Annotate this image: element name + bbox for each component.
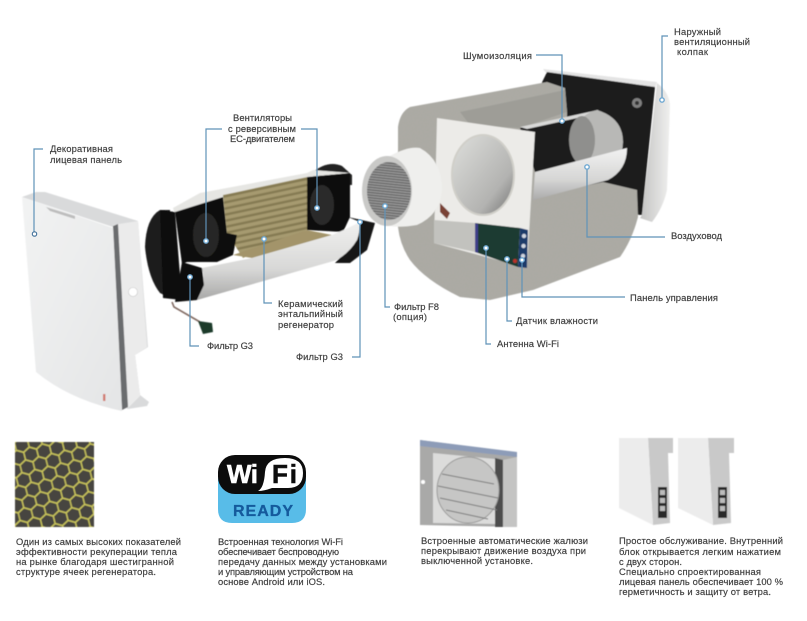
callout: sound insulation: [463, 50, 564, 123]
callout: sound insulation: Шумоизоляция: [463, 50, 532, 61]
logo: Wi-Fi ready: [218, 455, 306, 523]
callout: air duct: [585, 165, 723, 241]
text: automatic louvers: выключенной установке.: [421, 555, 533, 566]
callout: outer ventilation hood: Наружный: [674, 26, 721, 37]
callout: filter G3 left: Фильтр G3: [207, 340, 253, 351]
text: easy maintenance: лицевая панель обеспечивает 100 %: [619, 576, 783, 587]
panel: decorative front panel: [22, 192, 149, 411]
callout: outer ventilation hood: [660, 26, 750, 102]
callout: fans with reversible EC motor: с реверсивным: [228, 123, 296, 134]
callout: filter F8 optional: Фильтр F8: [394, 301, 439, 312]
text: regenerator efficiency: структуре ячеек регенератора.: [16, 566, 156, 577]
text: Wi-Fi technology: передачу данных между установками: [218, 556, 387, 567]
callout: ceramic enthalpy regenerator: регенератор: [278, 319, 334, 330]
callout: ceramic enthalpy regenerator: [262, 237, 343, 330]
callout: fans with reversible EC motor: EC-двигателем: [230, 133, 295, 144]
text: regenerator efficiency: эффективности рекуперации тепла: [16, 546, 178, 557]
text: regenerator efficiency: [16, 536, 181, 577]
text: Wi-Fi technology: основе Android или iOS.: [218, 576, 325, 587]
logo: Wi-Fi ready: READY: [233, 503, 293, 520]
image: automatic louvers: [420, 440, 517, 527]
image: hexagonal regenerator cells: [15, 442, 94, 527]
logo: Wi-Fi ready: Wi: [227, 459, 258, 489]
text: easy maintenance: [619, 535, 783, 597]
callout: filter G3 right: Фильтр G3: [296, 351, 343, 362]
text: Wi-Fi technology: Встроенная технология Wi-Fi: [218, 536, 343, 547]
callout: filter G3 left: [188, 275, 253, 351]
callout: filter F8 optional: (опция): [393, 311, 427, 322]
text: regenerator efficiency: Один из самых высоких показателей: [16, 536, 181, 547]
unit: foam housing with duct and outer hood: [398, 69, 670, 300]
image: front panels with controls: [619, 438, 734, 525]
text: easy maintenance: герметичность и защиту от ветра.: [619, 586, 771, 597]
callout: control panel: Панель управления: [630, 292, 718, 303]
callout: filter F8 optional: [383, 204, 439, 322]
callout: outer ventilation hood: вентиляционный: [674, 36, 750, 47]
callout: fans with reversible EC motor: [204, 112, 319, 243]
callout: air duct: Воздуховод: [671, 230, 723, 241]
text: Wi-Fi technology: [218, 536, 387, 587]
callout: Wi-Fi antenna: Антенна Wi-Fi: [497, 338, 559, 349]
callout: ceramic enthalpy regenerator: энтальпийный: [278, 308, 343, 319]
callout: decorative front panel: [32, 143, 122, 236]
callout: humidity sensor: Датчик влажности: [516, 315, 598, 326]
text: easy maintenance: блок открывается легким нажатием: [619, 546, 781, 557]
callout: filter G3 right: [296, 220, 362, 362]
callout: humidity sensor: [505, 257, 598, 326]
text: Wi-Fi technology: обеспечивает беспроводную: [218, 546, 339, 557]
callout: decorative front panel: лицевая панель: [50, 154, 122, 165]
text: automatic louvers: [421, 535, 588, 566]
text: automatic louvers: Встроенные автоматические жалюзи: [421, 535, 588, 546]
text: Wi-Fi technology: и управляющим устройством на: [218, 566, 354, 577]
callout: outer ventilation hood: колпак: [677, 46, 709, 57]
callout: ceramic enthalpy regenerator: Керамический: [278, 298, 343, 309]
text: easy maintenance: Простое обслуживание. Внутренний: [619, 535, 783, 546]
logo: Wi-Fi ready: Fi: [272, 459, 297, 489]
callout: control panel: [520, 258, 718, 303]
filter F8 round grille: [362, 148, 442, 227]
callout: fans with reversible EC motor: Вентиляторы: [233, 112, 292, 123]
text: easy maintenance: Специально спроектированная: [619, 566, 761, 577]
unit: heat recovery core cylinder: [145, 164, 375, 334]
callout: decorative front panel: Декоративная: [50, 143, 113, 154]
text: regenerator efficiency: на рынке благодаря шестигранной: [16, 556, 174, 567]
text: easy maintenance: с двух сторон.: [619, 556, 682, 567]
text: automatic louvers: перекрывают движение воздуха при: [421, 545, 586, 556]
callout: Wi-Fi antenna: [484, 246, 559, 349]
